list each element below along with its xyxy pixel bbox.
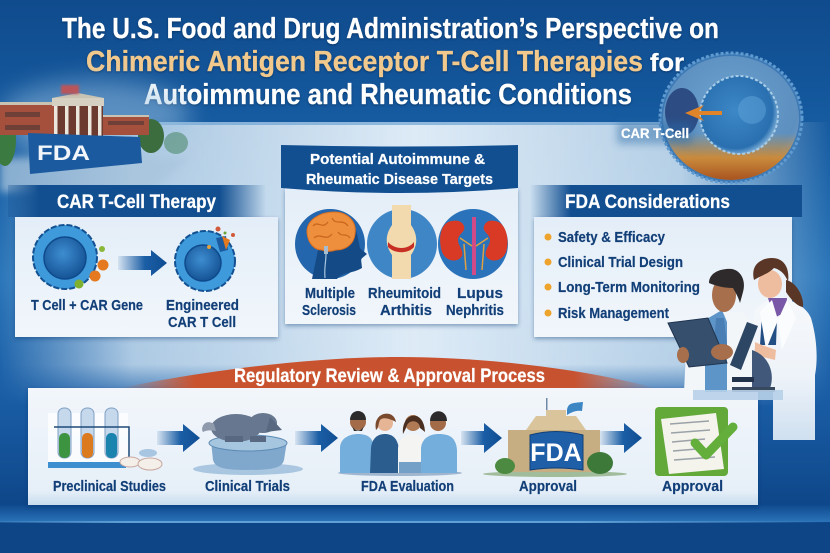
FDA building illustration: [0, 80, 190, 192]
microscope: [730, 322, 775, 392]
panel: regulatory review process: [28, 357, 758, 505]
list: considerations: Safety & Efficacy: [558, 229, 666, 246]
label: Multiple Sclerosis: Multiple: [305, 285, 355, 302]
CAR T-cell globe: [660, 53, 802, 183]
heading: FDA considerations: [530, 185, 802, 217]
panel: CAR T-cell therapy: [8, 185, 278, 337]
orange pointer arrow: [685, 105, 722, 121]
label: Clinical Trials: Clinical Trials: [205, 478, 290, 495]
title: Chimeric Antigen Receptor T-Cell Therapies: [86, 46, 643, 78]
title: The U.S. Food and Drug Administration’s Perspective on: [62, 13, 719, 45]
title: Autoimmune and Rheumatic Conditions: [144, 79, 632, 111]
list: considerations: [544, 229, 700, 322]
CAR T-Cell callout: [617, 122, 692, 144]
heading: regulatory review: Regulatory Review & Approval Process: [234, 366, 545, 387]
heading: CAR T-cell therapy: CAR T-Cell Therapy: [57, 192, 216, 213]
label: Approval: Approval: [519, 478, 577, 495]
icon: FDA evaluation team: [338, 411, 462, 476]
list: considerations: Clinical Trial Design: [558, 254, 683, 271]
panel: FDA considerations: [530, 185, 802, 337]
icon: test tubes: [48, 408, 162, 470]
label: T Cell + CAR Gene: T Cell + CAR Gene: [31, 297, 143, 314]
label: FDA Evaluation: FDA Evaluation: [361, 478, 454, 495]
label: Lupus Nephritis: Nephritis: [446, 302, 504, 319]
label: Rheumitoid Arthitis: Rheumitoid: [368, 285, 441, 302]
list: considerations: Long-Term Monitoring: [558, 279, 700, 296]
label: Lupus Nephritis: Lupus: [457, 285, 503, 302]
FDA sign: FDA: [37, 142, 90, 165]
hands: [677, 344, 733, 363]
icon: approval checklist: [655, 407, 733, 476]
heading: CAR T-cell therapy: [8, 185, 266, 217]
icon: FDA building: FDA: [530, 439, 582, 467]
title: [62, 13, 719, 111]
heading: disease targets: Potential Autoimmune &: [310, 151, 485, 168]
heading: disease targets: Rheumatic Disease Targets: [306, 171, 493, 188]
list: considerations: Risk Management: [558, 305, 669, 322]
icon: FDA building: [483, 398, 627, 477]
arrow: [461, 423, 502, 453]
label: Lupus Nephritis: [446, 285, 504, 319]
arrow: [600, 423, 642, 453]
icon: knee joint: [367, 205, 437, 279]
label: Engineered CAR T Cell: [166, 297, 239, 331]
icon: animal on platform: [193, 413, 303, 475]
label: Engineered CAR T Cell: CAR T Cell: [168, 314, 236, 331]
label: Engineered CAR T Cell: Engineered: [166, 297, 239, 314]
icon: T cell: [33, 225, 108, 289]
title: for: [650, 49, 684, 77]
label: Multiple Sclerosis: [302, 285, 356, 319]
label: Rheumitoid Arthitis: [368, 285, 441, 319]
icon: kidneys: [438, 209, 508, 279]
icon: engineered CAR T cell: [175, 226, 235, 291]
counter: [693, 390, 783, 400]
label: Approval final: Approval: [662, 478, 723, 495]
heading: regulatory review: [120, 357, 655, 388]
heading: FDA considerations: FDA Considerations: [565, 192, 730, 213]
icon: brain and head: [295, 209, 367, 279]
man scientist: [684, 269, 755, 392]
heading: disease targets: [281, 145, 518, 193]
arrow: [118, 250, 167, 276]
illustration: scientists: [668, 258, 817, 440]
clipboard: [668, 318, 727, 367]
CAR T-Cell callout: CAR T-Cell: [621, 125, 689, 141]
panel: disease targets: [281, 145, 518, 324]
woman scientist: [745, 258, 817, 440]
label: Rheumitoid Arthitis: Arthitis: [380, 302, 432, 319]
arrow: [295, 424, 338, 452]
label: Preclinical Studies: Preclinical Studies: [53, 478, 166, 495]
FDA sign: [28, 133, 142, 174]
arrow: [157, 424, 200, 452]
label: Multiple Sclerosis: Sclerosis: [302, 302, 356, 319]
